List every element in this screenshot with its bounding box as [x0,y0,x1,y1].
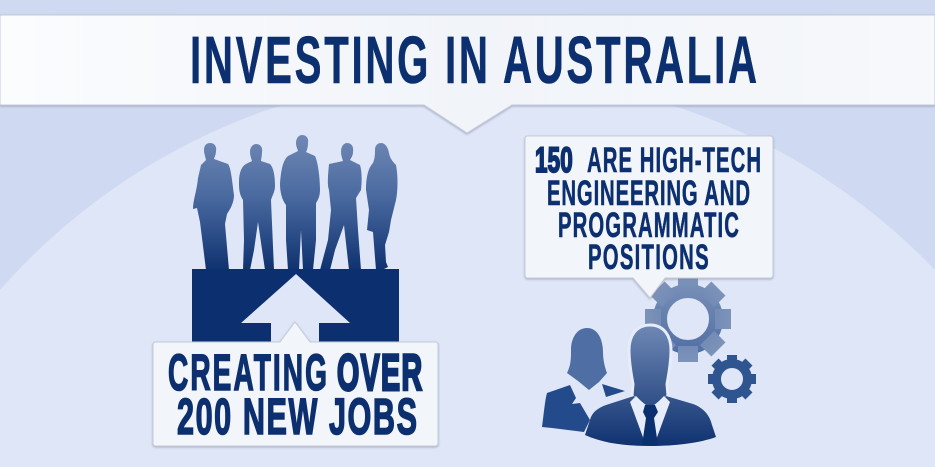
callout: high-tech positions [525,136,773,298]
person 5 [366,143,398,270]
icon: woman silhouette [542,328,625,432]
text: over: OVER [337,344,422,401]
title banner [0,15,935,133]
icon: large gear [645,276,731,362]
text: creating: CREATING [168,344,327,401]
icon: small gear [708,355,756,403]
person 1 [193,143,234,270]
person 2 [239,144,275,270]
text: programmatic: PROGRAMMATIC [558,206,739,246]
callout: creating jobs [153,322,438,446]
text: engineering and: ENGINEERING AND [547,174,750,214]
person 3 [280,135,320,270]
text: 150: 150 [535,141,573,180]
text: are high-tech: ARE HIGH-TECH [587,141,761,181]
text: positions: POSITIONS [588,238,709,278]
title: INVESTING IN AUSTRALIA [190,22,757,98]
platform with up arrow [192,269,399,342]
person 4 [320,143,362,270]
people group silhouettes [193,135,398,270]
icon: man silhouette [585,325,716,446]
text: 200 new jobs: 200 NEW JOBS [177,388,417,445]
